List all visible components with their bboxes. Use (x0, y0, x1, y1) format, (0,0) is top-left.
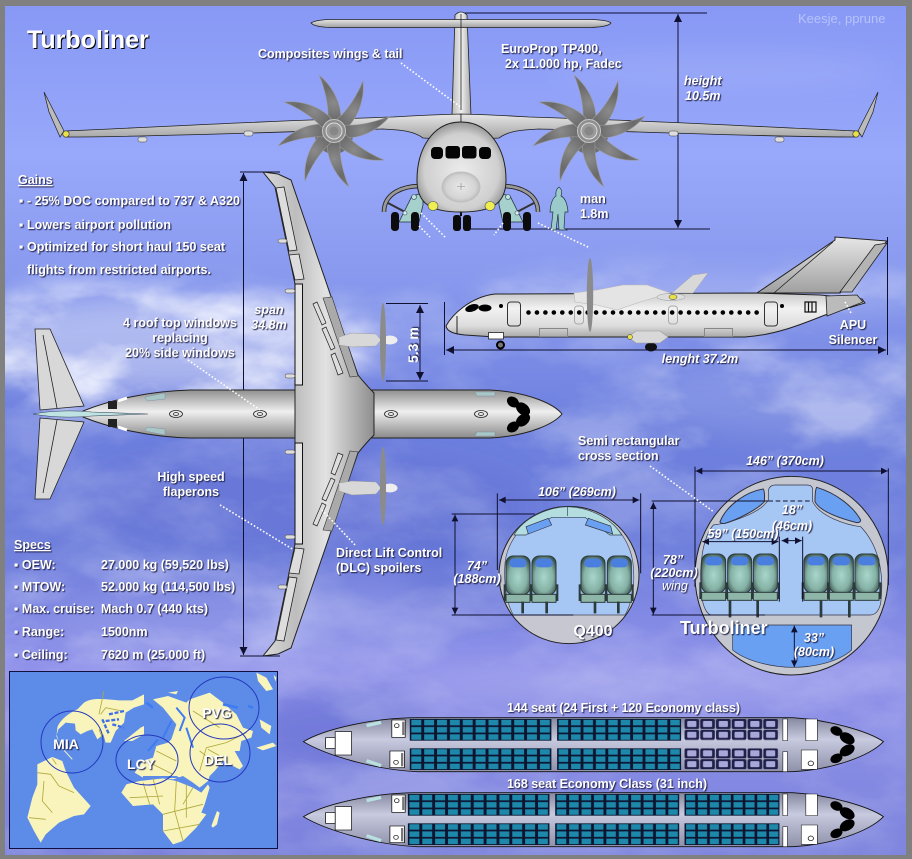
text block: specs: 7620 m (25.000 ft) (101, 648, 205, 662)
left propeller (278, 75, 390, 187)
label: APU: Silencer (829, 333, 877, 347)
right wing and gear (461, 92, 878, 231)
shell (695, 476, 888, 675)
fuselage (446, 293, 865, 337)
leader (650, 466, 714, 512)
tail fin (757, 237, 887, 293)
economy seats (410, 719, 681, 770)
map sea (10, 672, 278, 848)
label: length: lenght 37.2m (662, 352, 738, 366)
dimensions (652, 467, 888, 667)
economy seats (408, 794, 779, 845)
label: seats width: 59” (150cm) (708, 527, 778, 541)
text block: specs: ▪ Max. cruise: (14, 602, 94, 616)
panel: side view aircraft (444, 237, 888, 355)
leaders from gear (419, 213, 590, 248)
text block: gains: ▪ Lowers airport pollution (19, 218, 171, 232)
left wing and gear (44, 92, 461, 231)
airport labels: DEL (204, 752, 232, 768)
label: cross section: cross section (578, 449, 659, 463)
label: composites: Composites wings & tail (258, 47, 402, 61)
text block: gains: ▪ Optimized for short haul 150 seat (19, 240, 226, 254)
dots and vent (499, 302, 816, 312)
label: span: 34.8m (251, 318, 287, 332)
seat legs (523, 602, 618, 613)
text block: gains (18, 173, 240, 277)
label: Q400 width: 106” (269cm) (538, 485, 616, 499)
label: flaperons: High speed (157, 470, 225, 484)
label: roof top windows: replacing (152, 331, 208, 345)
label: Q400: Q400 (573, 623, 613, 640)
label: 168 seat layout: 168 seat Economy Class (31 inch) (507, 777, 707, 791)
label: aisle: 18” (782, 503, 802, 517)
text block: gains: ▪ - 25% DOC compared to 737 & A320 (19, 194, 240, 208)
text block: specs: 27.000 kg (59,520 lbs) (101, 558, 229, 572)
roof windows (170, 410, 488, 418)
label: Turboliner: Turboliner (680, 618, 768, 638)
length dimension (444, 237, 888, 355)
text block: gains: Gains (18, 173, 53, 187)
label: height: height (684, 74, 722, 88)
panel: 144 seat layout (303, 718, 884, 772)
label: height: 10.5m (685, 89, 720, 103)
label: span: span (254, 303, 284, 317)
overhead bins (720, 487, 861, 523)
first class seats (685, 719, 779, 770)
label: roof top windows: 20% side windows (125, 346, 235, 360)
label: flaperons: flaperons (163, 485, 219, 499)
fin (33, 411, 148, 417)
right propeller (533, 75, 645, 187)
front fuselage (417, 122, 506, 212)
label: engine: EuroProp TP400, (501, 42, 602, 56)
leader (220, 505, 294, 550)
cargo hold (733, 625, 852, 667)
seats (700, 554, 880, 600)
text block: specs (14, 538, 235, 662)
label: Turboliner height: (220cm) (650, 566, 698, 580)
title: Turboliner (27, 26, 149, 54)
airport labels: LCY (127, 756, 156, 772)
label: 5.3 m: 5.3 m (405, 327, 421, 363)
text block: specs: ▪ Ceiling: (14, 648, 68, 662)
label: Q400 height: (188cm) (453, 572, 501, 586)
tailplane (35, 329, 84, 499)
panel: Q400 cross section (452, 493, 641, 644)
label: Turboliner height: 78” (663, 553, 683, 567)
nose (456, 316, 458, 334)
label: cargo: 33” (804, 631, 824, 645)
leader (322, 510, 355, 545)
credit: Keesje, pprune (798, 11, 885, 26)
label: DLC: (DLC) spoilers (336, 561, 421, 575)
airport labels: PVG (202, 705, 232, 721)
fin and T-tail (311, 12, 611, 116)
lower wing details (276, 443, 398, 641)
wing and engine fairing (574, 273, 708, 310)
landing gear (488, 331, 668, 352)
text block: specs: ▪ MTOW: (14, 580, 65, 594)
label: DLC: Direct Lift Control (336, 546, 442, 560)
seats (505, 556, 633, 602)
upper wing details (276, 187, 398, 385)
text block: specs: 1500nm (101, 625, 148, 639)
airport labels: MIA (53, 736, 79, 752)
cockpit windows (505, 394, 533, 435)
doors (508, 302, 778, 336)
text block: specs: Specs (14, 538, 51, 552)
span dimension (240, 172, 280, 656)
bins (526, 518, 613, 534)
map land east (121, 673, 276, 844)
text block: specs: 52.000 kg (114,500 lbs) (101, 580, 235, 594)
map land west (27, 691, 144, 843)
panel: front view aircraft (44, 12, 878, 231)
label: APU: APU (840, 318, 866, 332)
seat legs (730, 601, 849, 617)
wing (263, 172, 374, 656)
engine spacing dimension (386, 304, 428, 381)
cabin (701, 485, 882, 615)
airport labels (53, 705, 232, 772)
panel: 168 seat layout (303, 793, 884, 847)
dimensions (452, 493, 641, 615)
APU silencer (826, 295, 863, 316)
height dimension (465, 13, 710, 229)
label: man: man (580, 192, 606, 206)
text block: specs: ▪ Range: (14, 625, 64, 639)
leader (401, 63, 462, 108)
range circles (41, 677, 259, 785)
ceiling lining (514, 507, 622, 535)
nose gear (453, 208, 471, 231)
cabin windows (528, 310, 758, 315)
label: 144 seat layout: 144 seat (24 First + 120 Economy class) (507, 701, 740, 715)
man figure (550, 187, 568, 230)
shell (499, 506, 639, 644)
cockpit windows (464, 303, 492, 313)
label: cargo: (80cm) (794, 645, 834, 659)
label: roof top windows: 4 roof top windows (123, 316, 237, 330)
cabin (505, 513, 634, 615)
label: Turboliner height: wing (662, 579, 688, 593)
panel: route map (10, 672, 278, 848)
label: engine: 2x 11.000 hp, Fadec (505, 57, 622, 71)
leader (188, 360, 260, 410)
APU leader (845, 302, 851, 313)
label: cross section: Semi rectangular (578, 434, 679, 448)
tail details (108, 392, 495, 436)
label: Q400 height: 74” (467, 559, 487, 573)
propeller (587, 258, 593, 332)
text block: specs: ▪ OEW: (14, 558, 56, 572)
text block: gains: flights from restricted airports. (27, 263, 211, 277)
label: aisle: (46cm) (772, 519, 812, 533)
panel: Turboliner cross section (652, 467, 888, 675)
panel: top view aircraft (33, 172, 562, 656)
text block: specs: Mach 0.7 (440 kts) (101, 602, 208, 616)
fuselage (83, 390, 562, 438)
label: Turboliner width: 146” (370cm) (746, 454, 824, 468)
label: man: 1.8m (580, 207, 608, 221)
